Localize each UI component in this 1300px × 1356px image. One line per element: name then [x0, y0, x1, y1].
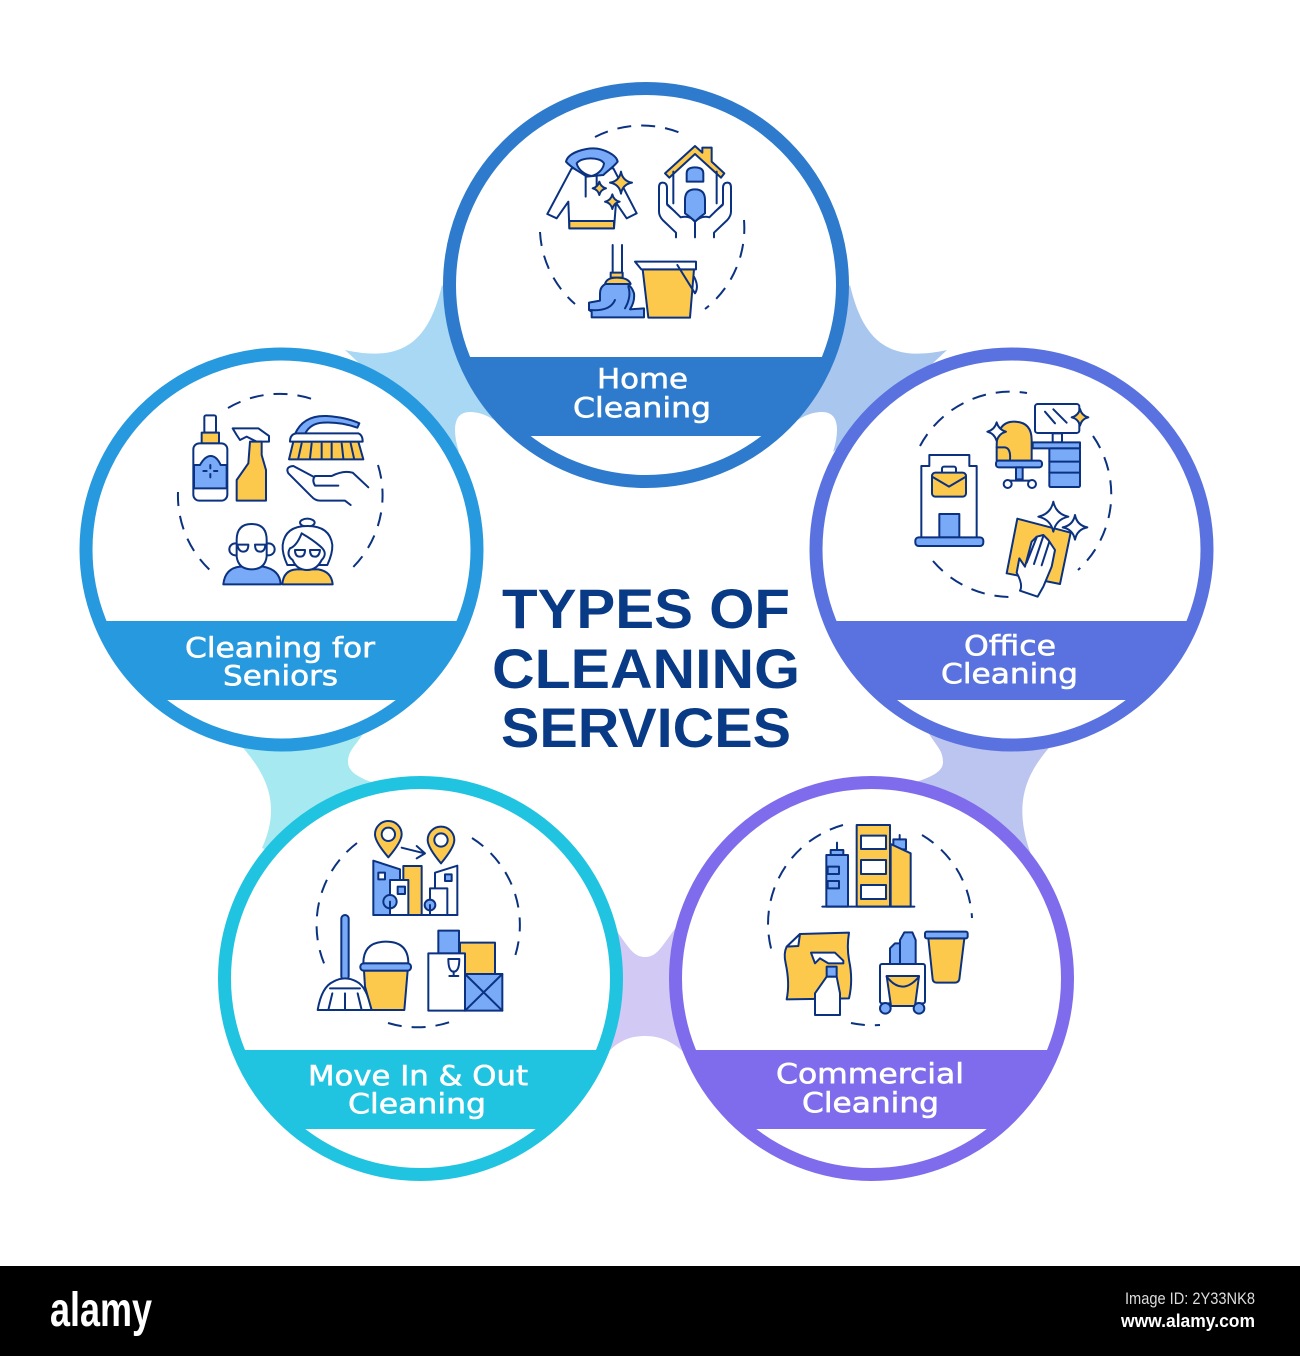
- label: Commercial: [776, 1057, 964, 1090]
- panel: home cleaning: [440, 88, 850, 482]
- label: [185, 631, 376, 692]
- label: Cleaning for: [185, 631, 376, 664]
- icons: [318, 821, 502, 1011]
- icons: [785, 825, 968, 1015]
- connector: seniors to move in and out: [236, 700, 400, 880]
- ring: [816, 354, 1207, 745]
- label: Cleaning: [941, 657, 1078, 690]
- dashed ring: [317, 838, 520, 1027]
- connector: office to commercial: [892, 700, 1056, 880]
- label: [573, 362, 711, 424]
- website: www.alamy.com: [1120, 1311, 1255, 1331]
- panel: office cleaning: [805, 354, 1217, 745]
- image id: Image ID: 2Y33NK8: [1125, 1289, 1255, 1308]
- ring: [86, 354, 477, 745]
- label: Move In & Out: [308, 1059, 528, 1092]
- dashed ring: [178, 394, 383, 572]
- icons: [547, 146, 731, 318]
- label: Cleaning: [348, 1087, 486, 1120]
- dashed ring: [540, 126, 744, 309]
- label: Seniors: [223, 659, 338, 692]
- label: Home: [597, 362, 688, 395]
- connector: seniors to home: [345, 285, 540, 452]
- label band: [696, 1050, 1047, 1129]
- panel: cleaning for seniors: [75, 354, 485, 745]
- title: [492, 577, 800, 759]
- label: Cleaning: [573, 391, 711, 424]
- label: [941, 629, 1078, 690]
- label: [776, 1057, 964, 1119]
- stock image footer bar: [0, 1266, 1300, 1356]
- panel: move in and out cleaning: [214, 782, 626, 1174]
- dashed ring: [768, 825, 972, 1025]
- label band: [245, 1050, 596, 1129]
- connector: move in and out to commercial: [595, 925, 700, 1070]
- connector: home to office: [752, 285, 947, 452]
- label band: [836, 621, 1186, 700]
- title: SERVICES: [501, 696, 791, 759]
- panel: commercial cleaning: [665, 782, 1077, 1174]
- label band: [106, 621, 456, 700]
- ring: [450, 88, 842, 482]
- footer logo: alamy: [50, 1284, 152, 1337]
- title: CLEANING: [492, 637, 800, 700]
- label: Office: [964, 629, 1056, 662]
- ring: [224, 782, 616, 1174]
- icons: [193, 415, 368, 584]
- label: [308, 1059, 528, 1120]
- title: TYPES OF: [502, 577, 790, 640]
- dashed ring: [920, 392, 1111, 597]
- ring: [676, 782, 1068, 1174]
- icons: [915, 404, 1088, 597]
- label: Cleaning: [802, 1086, 939, 1119]
- label band: [470, 357, 822, 436]
